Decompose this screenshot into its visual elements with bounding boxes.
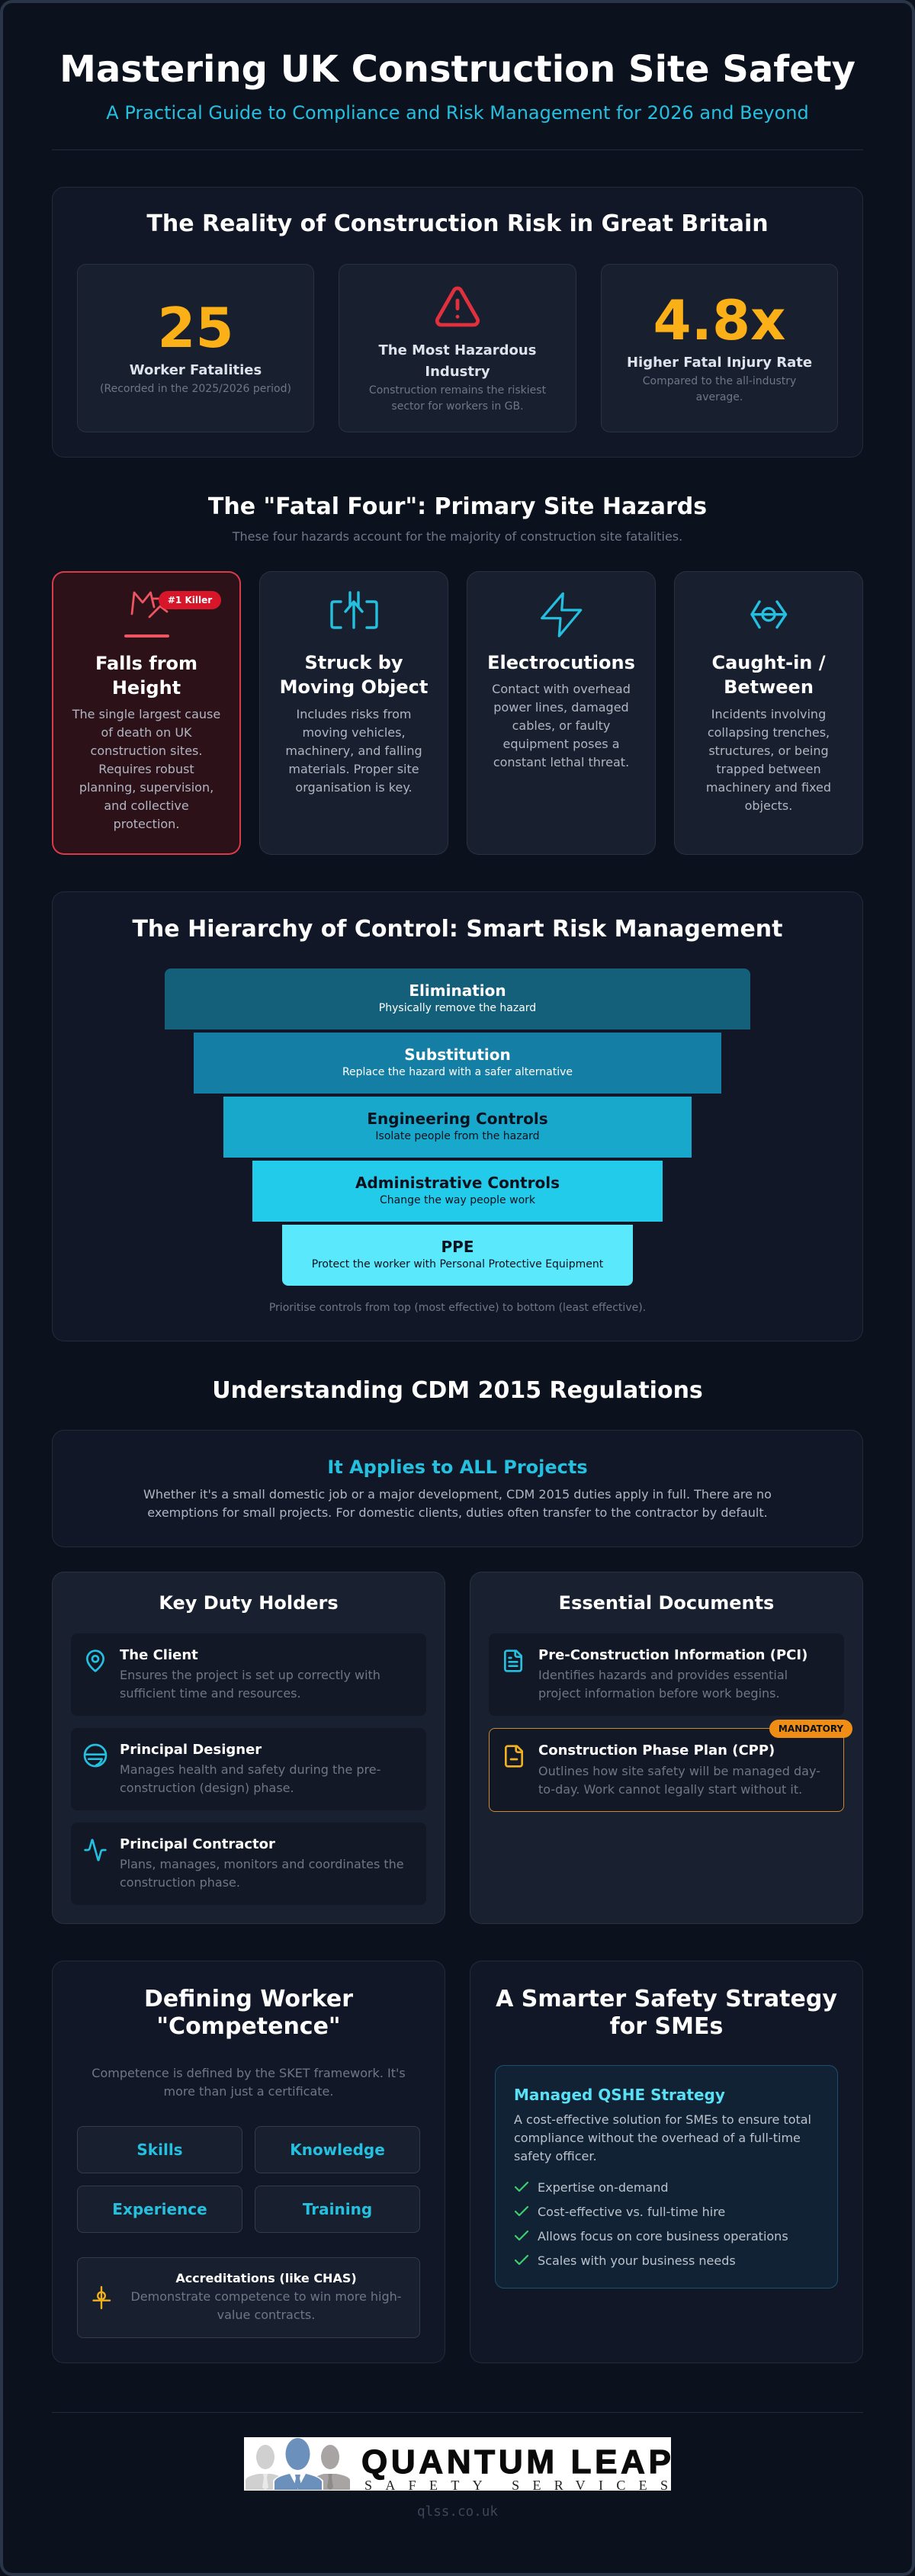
level name: Engineering Controls: [367, 1110, 548, 1128]
heading: Struck by: [304, 652, 403, 673]
description: trapped between: [716, 762, 821, 776]
hazard card: falls from height: [52, 571, 241, 855]
description: to-day. Work cannot legally start without it.: [538, 1782, 802, 1797]
item: principal contractor: [71, 1823, 426, 1905]
box: training: [255, 2186, 420, 2233]
callout: managed QSHE strategy: [495, 2065, 838, 2289]
title: Pre-Construction Information (PCI): [538, 1647, 807, 1663]
heading: Electrocutions: [487, 652, 635, 673]
description: Demonstrate competence to win more high-: [130, 2289, 402, 2304]
description: planning, supervision,: [79, 780, 214, 795]
hazard card: struck by moving object: [259, 571, 448, 855]
note: compared to average: Compared to the all-industry: [643, 375, 796, 387]
logo: Quantum Leap Safety Services: [244, 2437, 671, 2491]
note: recorded period: (Recorded in the 2025/2026 period): [100, 383, 291, 395]
item: principal designer: [71, 1728, 426, 1810]
number: 25: 25: [157, 296, 234, 360]
header: [52, 48, 863, 150]
heading: Caught-in /: [711, 652, 826, 673]
heading: Key Duty Holders: [159, 1592, 339, 1614]
description: [130, 2289, 402, 2322]
item: construction phase plan: [489, 1728, 844, 1812]
description: cables, or faulty: [512, 718, 610, 733]
footer url: qlss.co.uk: [417, 2504, 498, 2520]
description: Requires robust: [98, 762, 194, 776]
description: project information before work begins.: [538, 1686, 780, 1701]
description: Includes risks from: [297, 707, 411, 721]
panel: essential documents: [470, 1572, 863, 1924]
title: Mastering UK Construction Site Safety: [59, 48, 856, 91]
description: constant lethal threat.: [493, 755, 629, 769]
description: [72, 707, 220, 831]
heading: The "Fatal Four": Primary Site Hazards: [208, 493, 707, 520]
section heading: CDM 2015: Understanding CDM 2015 Regulations: [212, 1377, 703, 1404]
callout paragraph: [514, 2112, 811, 2163]
box: accreditations: [77, 2257, 420, 2338]
icon: warning triangle: [435, 287, 480, 326]
description: The single largest cause: [72, 707, 220, 721]
panel: smarter safety strategy: [470, 1961, 863, 2363]
icon: document minus: [505, 1745, 523, 1768]
box: skills: [77, 2126, 242, 2173]
icon: falling person: [124, 592, 169, 638]
description: of death on UK: [101, 725, 192, 740]
note: prioritise controls: Prioritise controls from top (most effective) to bottom (least effective).: [269, 1302, 646, 1314]
item: pre-construction information: [489, 1633, 844, 1716]
description: construction (design) phase.: [120, 1781, 294, 1795]
icon: document text: [504, 1649, 522, 1672]
icon: accreditation mark: [92, 2286, 111, 2309]
heading: [95, 653, 197, 699]
description: structures, or being: [708, 744, 829, 758]
description: sufficient time and resources.: [120, 1686, 301, 1701]
heading: reality of risk: The Reality of Construction Risk in Great Britain: [146, 210, 769, 237]
check icon: [514, 2181, 529, 2192]
box: knowledge: [255, 2126, 420, 2173]
title: Accreditations (like CHAS): [175, 2271, 357, 2285]
note: riskiest sector: [369, 384, 546, 413]
heading: Defining Worker: [144, 1986, 353, 2012]
check icon: [514, 2254, 529, 2265]
hazard card: caught-in between: [674, 571, 863, 855]
icon: moving object arrow: [330, 591, 378, 629]
level description: Change the way people work: [380, 1194, 535, 1206]
note: riskiest sector: Construction remains the riskiest: [369, 384, 546, 397]
number: 4.8x: 4.8x: [653, 288, 785, 352]
panel: construction risk statistics: [52, 187, 863, 458]
description: construction phase.: [120, 1875, 240, 1890]
check icon: [514, 2230, 529, 2240]
heading: Height: [112, 677, 181, 699]
title: Principal Contractor: [120, 1836, 275, 1852]
heading: for SMEs: [610, 2013, 723, 2040]
description: [538, 1668, 788, 1701]
label: Experience: [112, 2200, 207, 2218]
chart: inverted pyramid: [165, 968, 750, 1286]
level: ppe: [282, 1225, 633, 1286]
logo: Quantum Leap Safety Services: QUANTUM LEAP: [361, 2443, 671, 2481]
check icon: [514, 2205, 529, 2216]
panel: key duty holders: [52, 1572, 445, 1924]
description: Contact with overhead: [492, 682, 631, 696]
benefit: Scales with your business needs: [538, 2253, 736, 2268]
label: most hazardous industry: Industry: [425, 364, 490, 380]
note: compared to average: average.: [696, 391, 743, 403]
level: elimination: [165, 968, 750, 1029]
label: Skills: [136, 2141, 183, 2159]
description: equipment poses a: [502, 737, 620, 751]
title: Principal Designer: [120, 1742, 262, 1758]
description: construction sites.: [91, 744, 202, 758]
box: experience: [77, 2186, 242, 2233]
icon: hard hat globe: [84, 1743, 107, 1768]
heading: "Competence": [156, 2013, 341, 2040]
heading: It Applies to ALL Projects: [327, 1457, 588, 1478]
icon: crushing diamond: [750, 600, 787, 628]
paragraph: more than just a certificate.: [164, 2084, 333, 2099]
heading: A Smarter Safety Strategy: [496, 1986, 837, 2012]
subheading: These four hazards account for the majority of construction site fatalities.: [233, 529, 682, 544]
description: machinery, and falling: [285, 744, 422, 758]
stat card: higher fatal injury rate: [601, 264, 838, 432]
heading: [496, 1986, 837, 2040]
description: Manages health and safety during the pre-: [120, 1762, 380, 1777]
level name: Substitution: [404, 1045, 511, 1064]
description: Identifies hazards and provides essential: [538, 1668, 788, 1682]
paragraph: [143, 1487, 772, 1520]
badge: #1 killer: #1 Killer: [168, 595, 212, 605]
level description: Physically remove the hazard: [379, 1002, 536, 1014]
description: Plans, manages, monitors and coordinates the: [120, 1857, 404, 1871]
benefit: Allows focus on core business operations: [538, 2229, 788, 2244]
heading: The Hierarchy of Control: Smart Risk Management: [132, 916, 783, 943]
description: Ensures the project is set up correctly with: [120, 1668, 380, 1682]
callout title: Managed QSHE Strategy: [514, 2086, 725, 2104]
level: engineering controls: [223, 1097, 692, 1158]
note: compared to average: [643, 375, 796, 403]
heading: [144, 1986, 353, 2040]
label: higher fatal injury rate: Higher Fatal Injury Rate: [627, 355, 812, 371]
panel: hierarchy of control: [52, 891, 863, 1341]
label: most hazardous industry: The Most Hazardous: [379, 342, 536, 358]
hazard card: electrocutions: [467, 571, 656, 855]
callout paragraph: A cost-effective solution for SMEs to ensure total: [514, 2112, 811, 2127]
level name: Elimination: [409, 981, 506, 1000]
description: [120, 1762, 380, 1795]
note: riskiest sector: sector for workers in GB.: [391, 400, 524, 413]
level name: PPE: [441, 1238, 474, 1256]
description: Outlines how site safety will be managed day-: [538, 1764, 820, 1778]
badge: mandatory: MANDATORY: [779, 1723, 843, 1734]
label: Knowledge: [290, 2141, 385, 2159]
panel: applies to all projects: [52, 1430, 863, 1547]
paragraph: exemptions for small projects. For domestic clients, duties often transfer to the contractor by default.: [147, 1505, 768, 1520]
panel: defining worker competence: [52, 1961, 445, 2363]
paragraph: Competence is defined by the SKET framework. It's: [92, 2066, 406, 2080]
paragraph: [92, 2066, 406, 2099]
stat card: most hazardous industry: [339, 264, 576, 432]
description: protection.: [114, 817, 179, 831]
title: The Client: [120, 1647, 198, 1663]
heading: [280, 652, 428, 698]
description: [706, 707, 831, 813]
subtitle: A Practical Guide to Compliance and Risk Management for 2026 and Beyond: [106, 102, 809, 124]
icon: lightning bolt: [541, 592, 583, 638]
description: and collective: [104, 798, 189, 813]
description: [492, 682, 631, 769]
badge: mandatory: [769, 1720, 852, 1738]
logo: Quantum Leap Safety Services: SAFETY SERVICES: [364, 2478, 668, 2493]
level name: Administrative Controls: [355, 1174, 560, 1192]
callout paragraph: safety officer.: [514, 2149, 597, 2163]
description: value contracts.: [217, 2308, 315, 2322]
item: the client: [71, 1633, 426, 1716]
level description: Protect the worker with Personal Protective Equipment: [312, 1258, 603, 1270]
heading: Falls from: [95, 653, 197, 674]
level description: Replace the hazard with a safer alternative: [342, 1066, 573, 1078]
label: most hazardous industry: [378, 342, 536, 380]
heading: Essential Documents: [559, 1592, 774, 1614]
heading: Between: [724, 676, 814, 698]
icon: activity pulse: [84, 1839, 107, 1861]
description: [285, 707, 422, 795]
description: materials. Proper site: [288, 762, 419, 776]
heading: Moving Object: [280, 676, 428, 698]
description: [120, 1857, 404, 1890]
heading: [711, 652, 826, 698]
paragraph: Whether it's a small domestic job or a major development, CDM 2015 duties apply in full. There are no: [143, 1487, 772, 1502]
stat card: worker fatalities: [77, 264, 314, 432]
description: [538, 1764, 820, 1797]
icon: map pin: [86, 1649, 104, 1672]
description: collapsing trenches,: [708, 725, 830, 740]
benefit: Cost-effective vs. full-time hire: [538, 2205, 725, 2219]
title: Construction Phase Plan (CPP): [538, 1742, 775, 1759]
description: objects.: [745, 798, 792, 813]
description: moving vehicles,: [302, 725, 406, 740]
level: substitution: [194, 1033, 721, 1094]
description: machinery and fixed: [706, 780, 831, 795]
level: administrative controls: [252, 1161, 663, 1222]
level description: Isolate people from the hazard: [375, 1130, 540, 1142]
callout paragraph: compliance without the overhead of a full-time: [514, 2131, 801, 2145]
badge: #1 killer: [159, 591, 221, 609]
description: [120, 1668, 380, 1701]
benefit list: [514, 2180, 788, 2268]
label: Training: [303, 2200, 372, 2218]
description: power lines, damaged: [493, 700, 629, 715]
label: worker fatalities: Worker Fatalities: [130, 362, 262, 378]
benefit: Expertise on-demand: [538, 2180, 669, 2195]
description: organisation is key.: [295, 780, 413, 795]
description: Incidents involving: [711, 707, 826, 721]
section heading: fatal four: [208, 493, 707, 544]
